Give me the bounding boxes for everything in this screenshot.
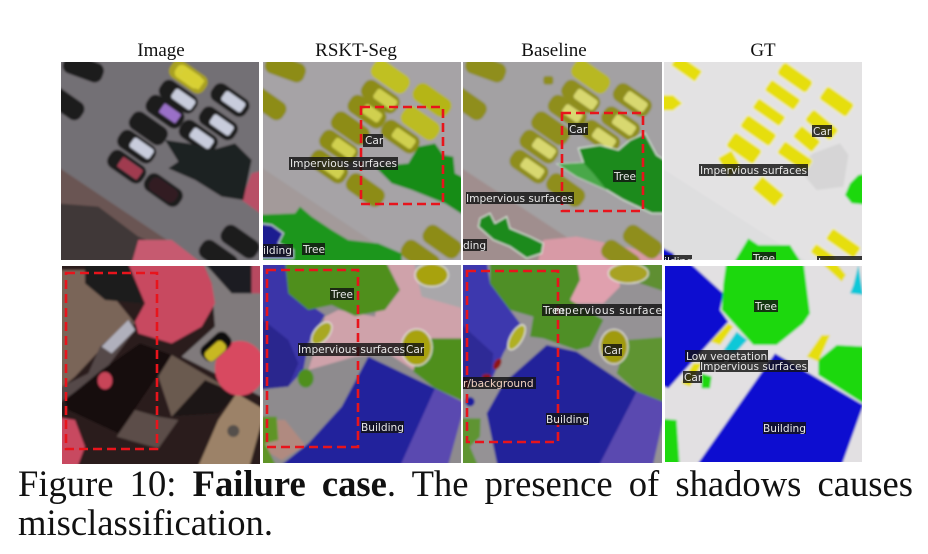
labels: row 1 Baseline bbox=[463, 123, 636, 252]
labels: row 2 Baseline bbox=[463, 304, 662, 426]
panel: row 2 GT bbox=[665, 266, 862, 462]
label: Car: Car bbox=[365, 135, 384, 147]
label: clipped bottom-edge labels: Tree bbox=[752, 253, 775, 265]
label: Tree: Tree bbox=[754, 301, 777, 313]
label: Car: Car bbox=[813, 126, 832, 138]
labels: row 2 GT bbox=[683, 300, 808, 435]
label: Tree and Impervious surfaces overlap: Tree bbox=[542, 305, 565, 317]
panel: row 1 GT bbox=[664, 62, 862, 260]
figure caption: Figure 10: Failure case. The presence of shadows causes bbox=[18, 463, 913, 504]
label: clipped bottom-edge labels: ilding bbox=[664, 256, 693, 268]
label: Tree: Tree bbox=[302, 244, 325, 256]
label: Impervious surfaces: Impervious surfaces bbox=[290, 158, 397, 170]
heading: Image: Image bbox=[137, 40, 185, 61]
heading: GT: GT bbox=[750, 40, 776, 61]
labels: row 1 RSKT-Seg bbox=[263, 134, 398, 257]
label: Tree and Impervious surfaces overlap: mpervious surface bbox=[554, 305, 662, 317]
panel: row 2 image bbox=[62, 266, 260, 464]
panel: row 1 RSKT-Seg bbox=[263, 62, 461, 260]
figure caption bbox=[18, 463, 913, 543]
panel: row 2 RSKT-Seg bbox=[263, 265, 461, 463]
panel: row 1 image bbox=[61, 62, 259, 260]
label: Building: Building bbox=[361, 422, 404, 434]
panel: row 2 Baseline bbox=[463, 265, 662, 463]
figure caption: misclassification. bbox=[18, 502, 273, 543]
labels: row 1 GT bbox=[664, 125, 868, 269]
label: Building: Building bbox=[763, 423, 806, 435]
red dashed box bbox=[66, 273, 157, 449]
label: Impervious surfaces: Impervious surfaces bbox=[700, 165, 807, 177]
label: Car: Car bbox=[604, 345, 623, 357]
label: Car: Car bbox=[684, 372, 703, 384]
red dashed box bbox=[361, 107, 443, 204]
label: Building: Building bbox=[546, 414, 589, 426]
label: Building fragment: ding bbox=[463, 240, 486, 252]
label: Low vegetation: Low vegetation bbox=[686, 351, 767, 363]
label: background: r/background bbox=[463, 378, 534, 390]
label: Car: Car bbox=[406, 344, 425, 356]
label: Tree: Tree bbox=[613, 171, 636, 183]
label: clipped bottom-edge labels bbox=[664, 252, 862, 260]
red dashed box bbox=[267, 270, 358, 447]
label: Impervious surfaces: Impervious surfaces bbox=[466, 193, 573, 205]
label: Building fragment: ilding bbox=[263, 245, 292, 257]
label: Car: Car bbox=[569, 124, 588, 136]
labels: row 2 RSKT-Seg bbox=[298, 288, 425, 434]
label: Impervious surfaces: Impervious surfaces bbox=[298, 344, 405, 356]
panel: row 1 Baseline bbox=[463, 62, 662, 260]
label: Impervious surfaces: Impervious surfaces bbox=[700, 361, 807, 373]
heading: RSKT-Seg: RSKT-Seg bbox=[315, 40, 397, 61]
red dashed box bbox=[562, 113, 643, 211]
label: Tree: Tree bbox=[330, 289, 353, 301]
red dashed box bbox=[467, 271, 558, 442]
heading: Baseline: Baseline bbox=[521, 40, 587, 61]
label: clipped bottom-edge labels: Low vege bbox=[818, 257, 868, 269]
